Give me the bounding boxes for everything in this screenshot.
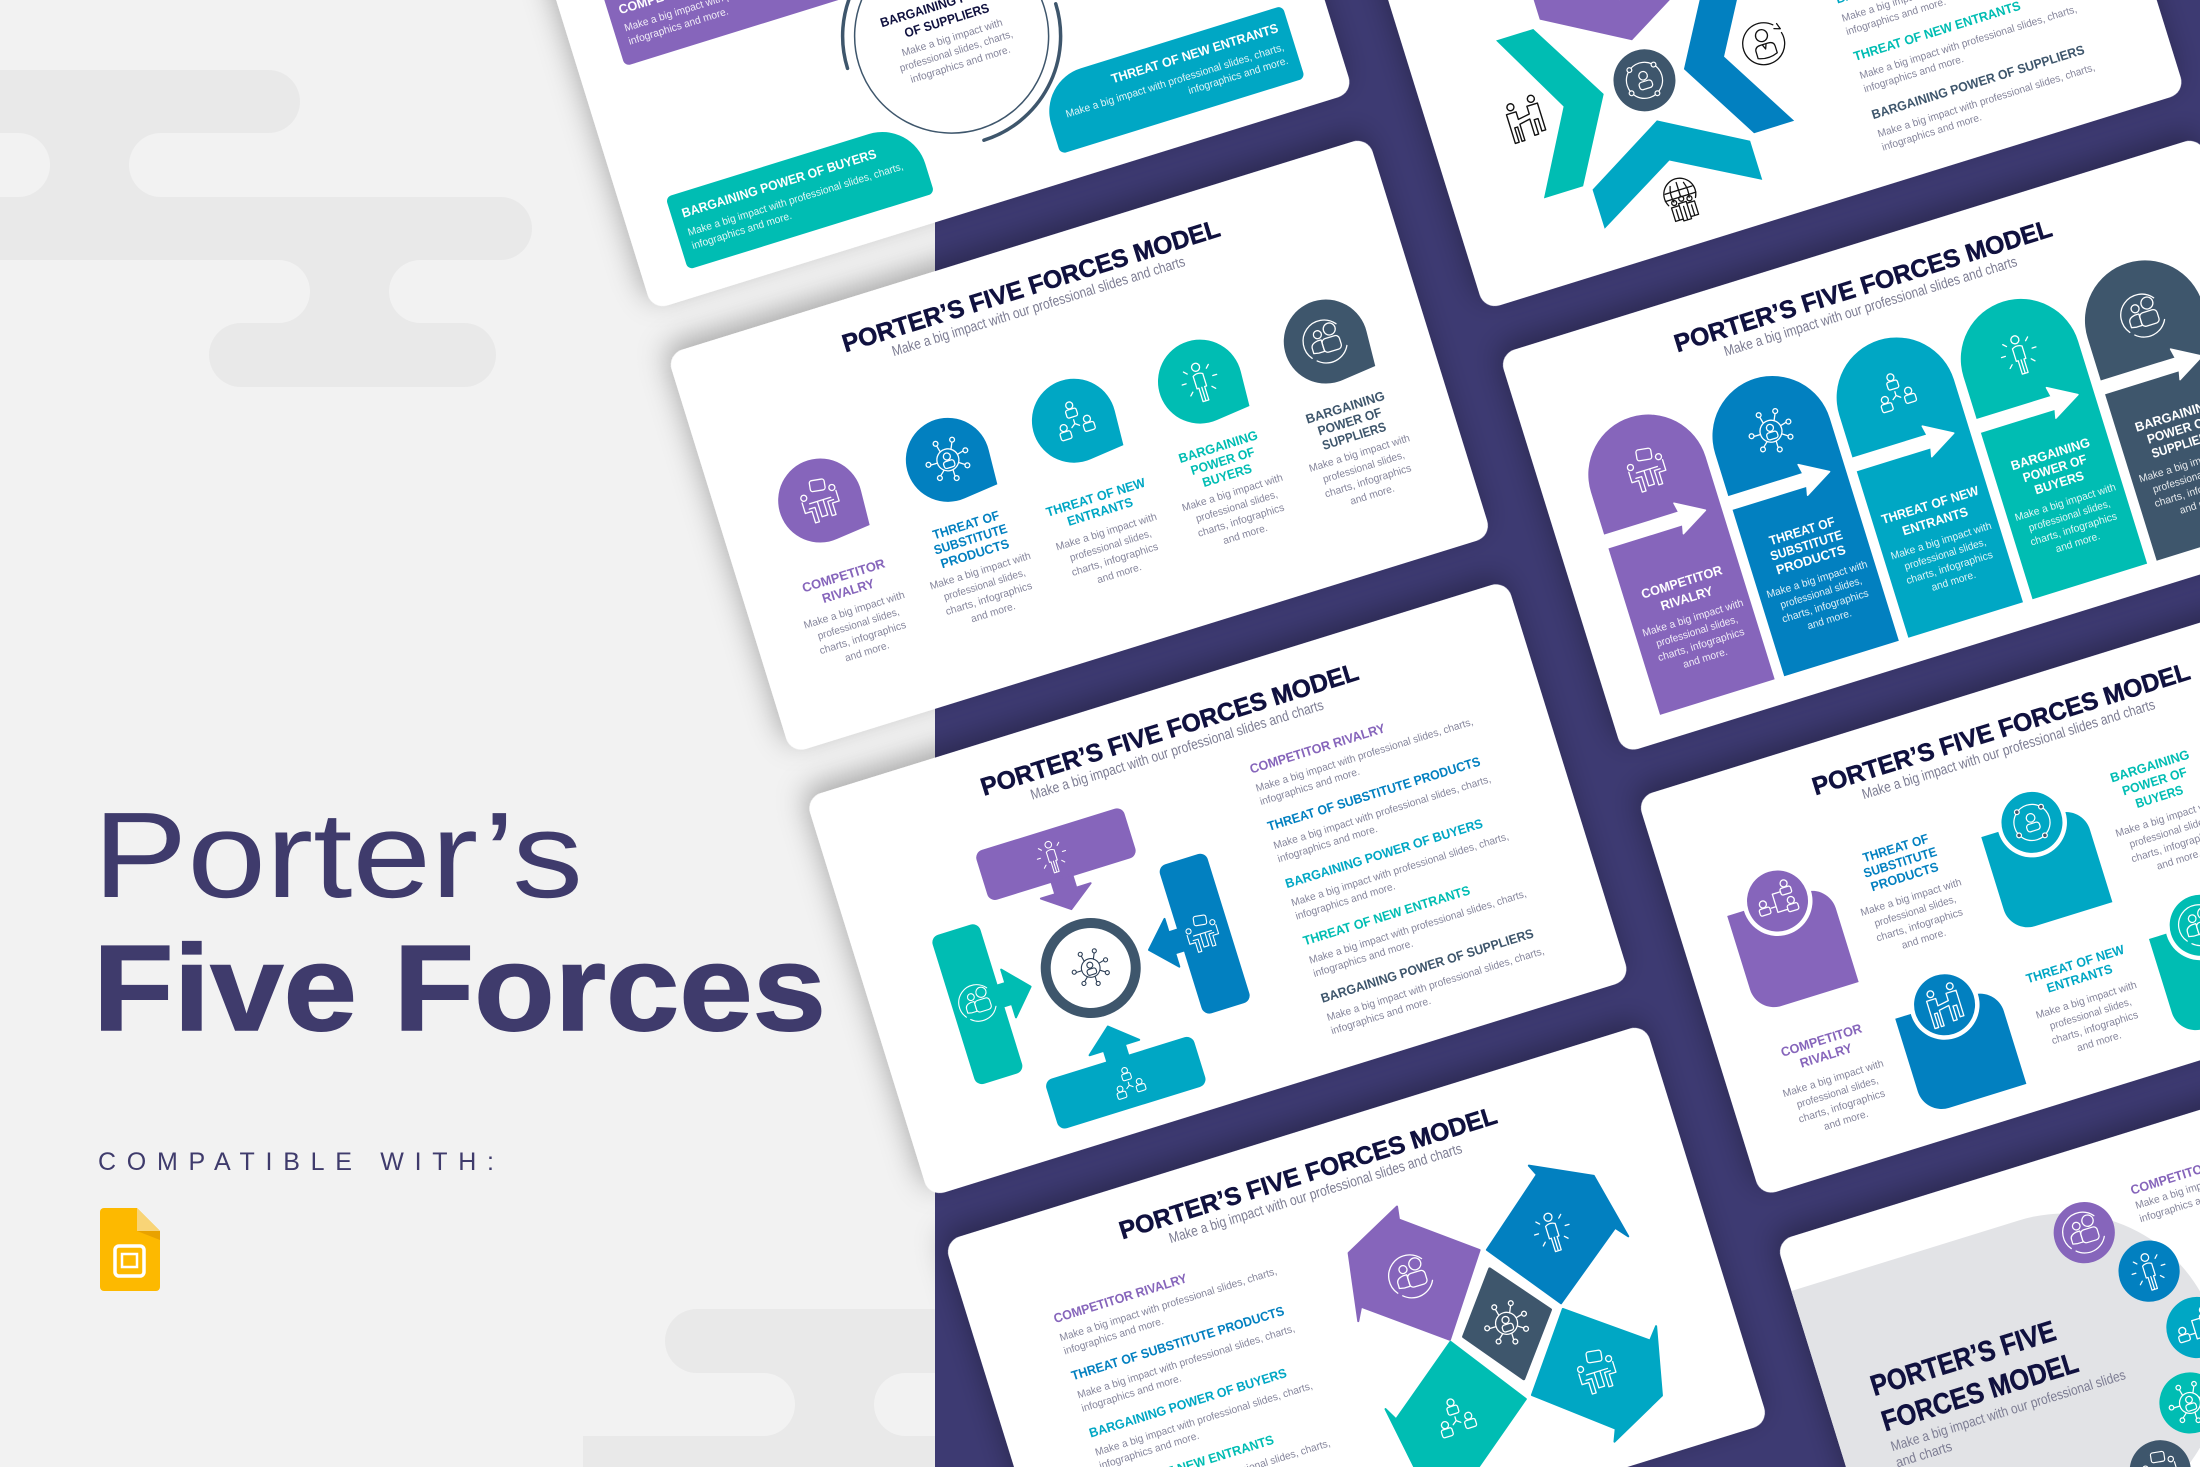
- slide title: [1867, 1312, 2082, 1438]
- force: threat of substitute products: charts, infographics: [944, 580, 1034, 618]
- callout: bargaining power of buyers: Make a big impact with professional slides, charts,: [686, 161, 905, 239]
- list: five forces: [1248, 695, 1550, 1037]
- force: bargaining power of buyers: professional slides,: [1194, 489, 1279, 525]
- list: five forces: Make a big impact with professional slides, charts,: [1272, 773, 1492, 852]
- list: five forces: Make a big impact with professional slides, charts,: [1325, 945, 1546, 1024]
- dark purple backdrop panel: [935, 0, 2200, 1467]
- force: bargaining power of buyers: [1136, 326, 1297, 556]
- slide card: [805, 580, 1630, 1197]
- force: threat of new entrants: and more.: [1096, 561, 1143, 586]
- list: five forces: Make a big impact with professional slides, charts,: [1058, 1265, 1279, 1344]
- slide subtitle: [1889, 1366, 2132, 1467]
- arch: threat of new entrants: professional slides,: [1903, 536, 1988, 573]
- callout: threat of new entrants: Make a big impact with professional slides, charts,: [1064, 41, 1286, 120]
- list: five forces: Make a big impact with professional slides, charts,: [1290, 831, 1510, 909]
- cloud decoration top left: [0, 70, 639, 387]
- slide card: [1499, 137, 2200, 754]
- slide title: PORTER’S FIVE: [1867, 1315, 2060, 1403]
- slide subtitle: Make a big impact with our professional slides and charts: [1167, 1141, 1464, 1247]
- text: competitor rivalry: and more.: [1822, 1108, 1870, 1133]
- text: threat of substitute products: charts, infographics: [1875, 906, 1964, 944]
- force: competitor rivalry: and more.: [843, 639, 891, 664]
- force: threat of substitute products: professional slides,: [942, 567, 1027, 603]
- force: bargaining power of suppliers: SUPPLIERS: [1320, 419, 1388, 453]
- slide title: PORTER’S FIVE FORCES MODEL: [1671, 215, 2056, 358]
- arrow: cyan lower right: [1510, 1284, 1685, 1461]
- center circle: bargaining power of suppliers: professional slides, charts,: [898, 28, 1014, 75]
- force: competitor rivalry: charts, infographics: [818, 619, 908, 657]
- arch: threat of new entrants: charts, infographics: [1905, 549, 1994, 587]
- left box arrow: [930, 913, 1054, 1086]
- list: five forces: infographics and more.: [1312, 938, 1415, 980]
- callout: threat of new entrants: THREAT OF NEW ENTRANTS: [1109, 20, 1280, 86]
- arch: threat of new entrants: and more.: [1930, 569, 1977, 594]
- arch: bargaining power of suppliers: [2069, 245, 2200, 561]
- star: blue chevron: [1659, 0, 1794, 147]
- force: threat of substitute products: and more.: [969, 600, 1017, 625]
- force: threat of new entrants: [1009, 366, 1171, 595]
- icon: google slides: [100, 1208, 160, 1291]
- force: competitor rivalry: professional slides,: [816, 606, 901, 643]
- slide: arc of circles on grey panel: [1776, 1024, 2200, 1467]
- arch: threat of substitute products: and more.: [1806, 607, 1853, 632]
- slide subtitle: Make a big impact with our professional slides and charts: [1722, 254, 2019, 360]
- arch: bargaining power of buyers: Make a big impact with: [2013, 481, 2117, 524]
- force: bargaining power of buyers: BUYERS: [1200, 461, 1254, 490]
- force: bargaining power of buyers: charts, infographics: [1196, 502, 1286, 540]
- list: five forces: COMPETITOR RIVALRY: [1052, 1270, 1189, 1326]
- list: five forces: Make a big impact with professional slides, charts,: [1858, 3, 2079, 82]
- text: threat of new entrants: Make a big impact with: [2034, 979, 2138, 1022]
- arch: bargaining power of buyers: charts, infographics: [2029, 510, 2118, 548]
- force: bargaining power of suppliers: Make a big impact with: [1308, 432, 1412, 475]
- force: bargaining power of buyers: and more.: [1222, 522, 1269, 547]
- badge: cyan: [2159, 1289, 2200, 1366]
- force: bargaining power of buyers: Make a big impact with: [1181, 472, 1285, 514]
- list: five forces: Make a big impact with professional slides, charts,: [1076, 1323, 1296, 1401]
- text: competitor rivalry: charts, infographics: [1797, 1087, 1887, 1126]
- text: threat of new entrants: charts, infographics: [2050, 1009, 2140, 1047]
- arch: threat of substitute products: professional slides,: [1779, 575, 1864, 611]
- list: five forces: Make a big impact with professional slides, charts,: [1254, 716, 1475, 795]
- arch: bargaining power of buyers: and more.: [2054, 530, 2102, 555]
- force: bargaining power of buyers: BARGAINING: [1177, 427, 1259, 466]
- text: threat of new entrants: professional slides,: [2048, 996, 2133, 1032]
- arrow: purple upper left: [1329, 1187, 1502, 1364]
- slide card: [667, 137, 1492, 754]
- badge: blue: [2111, 1233, 2187, 1309]
- force: threat of substitute products: [883, 405, 1045, 634]
- arch: threat of substitute products: SUBSTITUTE: [1768, 527, 1845, 564]
- list: five forces: infographics and more.: [1062, 1315, 1165, 1357]
- arch: threat of substitute products: PRODUCTS: [1774, 542, 1848, 577]
- slide title: PORTER’S FIVE FORCES MODEL: [1809, 658, 2194, 801]
- list: five forces: THREAT OF SUBSTITUTE PRODUCTS: [1266, 754, 1482, 834]
- text: threat of new entrants: and more.: [2075, 1029, 2123, 1054]
- slide: central ring with four arrows: [805, 580, 1630, 1197]
- force: threat of new entrants: charts, infographics: [1070, 541, 1160, 579]
- callout: competitor rivalry: [602, 0, 869, 66]
- icon: handshake: [1503, 94, 1547, 143]
- text: bargaining power of buyers: POWER OF: [2120, 764, 2189, 798]
- arch: competitor rivalry: Make a big impact with: [1641, 597, 1745, 640]
- list: five forces: infographics and more.: [1862, 53, 1965, 95]
- slide card: [1776, 1024, 2200, 1467]
- arch: competitor rivalry: professional slides,: [1655, 613, 1739, 650]
- slide card: [1637, 580, 2200, 1197]
- tile: threat of substitute products: [1885, 955, 2026, 1115]
- arrow: teal lower left: [1372, 1325, 1545, 1467]
- force: bargaining power of suppliers: professional slides,: [1321, 449, 1406, 486]
- star: purple chevron: [1528, 0, 1711, 65]
- arch: competitor rivalry: charts, infographics: [1656, 626, 1746, 664]
- force: threat of new entrants: Make a big impact with: [1054, 511, 1158, 553]
- tile: threat of new entrants: [1971, 773, 2112, 934]
- text: threat of substitute products: THREAT OF: [1861, 831, 1930, 865]
- tile: competitor rivalry: [1717, 852, 1859, 1013]
- text: threat of new entrants: ENTRANTS: [2045, 961, 2115, 996]
- arch: threat of substitute products: THREAT OF: [1767, 514, 1837, 548]
- text: competitor rivalry: [2129, 1116, 2200, 1225]
- callout: threat of new entrants: [1038, 6, 1305, 154]
- arch: threat of substitute products: Make a big impact with: [1765, 558, 1869, 601]
- badge: teal: [2152, 1365, 2200, 1441]
- icon: globe with people: [1660, 174, 1703, 224]
- text: competitor rivalry: COMPETITOR: [1779, 1020, 1864, 1060]
- arch: competitor rivalry: COMPETITOR: [1639, 562, 1725, 602]
- arch: threat of new entrants: THREAT OF NEW: [1880, 483, 1981, 527]
- list: five forces: THREAT OF SUBSTITUTE PRODUCTS: [1069, 1303, 1286, 1383]
- list: five forces: Make a big impact with professional slides, charts,: [1308, 888, 1528, 967]
- force: threat of substitute products: PRODUCTS: [939, 536, 1011, 571]
- list: five forces: COMPETITOR RIVALRY: [1248, 720, 1387, 777]
- list: five forces: BARGAINING POWER OF BUYERS: [1283, 816, 1485, 891]
- callout: bargaining power of buyers: BARGAINING POWER OF BUYERS: [680, 146, 878, 221]
- center diamond: [1447, 1255, 1568, 1392]
- icon: person in ring: [1737, 17, 1790, 70]
- force: bargaining power of suppliers: and more.: [1349, 483, 1396, 508]
- text: threat of new entrants: THREAT OF NEW: [2024, 942, 2127, 986]
- arch: competitor rivalry: and more.: [1682, 646, 1729, 671]
- arch: threat of new entrants: ENTRANTS: [1900, 504, 1970, 538]
- center circle: bargaining power of suppliers: infographics and more.: [909, 44, 1012, 86]
- text: competitor rivalry: Make a big impact with: [1781, 1058, 1885, 1100]
- text: competitor rivalry: professional slides,: [1795, 1074, 1880, 1111]
- force: competitor rivalry: Make a big impact with: [802, 589, 906, 632]
- star: center circle: [1606, 42, 1683, 119]
- text: threat of substitute products: PRODUCTS: [1869, 859, 1940, 894]
- grey panel: [1791, 1174, 2200, 1467]
- force: threat of new entrants: professional slides,: [1068, 528, 1153, 564]
- tile: bargaining power of buyers: [2139, 876, 2200, 1036]
- list: five forces: BARGAINING POWER OF SUPPLIERS: [1870, 42, 2086, 122]
- list: five forces: infographics and more.: [1880, 111, 1983, 154]
- list: five forces: infographics and more.: [1330, 995, 1432, 1037]
- center circle: bargaining power of suppliers: Make a big impact with: [900, 17, 1004, 59]
- arch: threat of substitute products: charts, infographics: [1781, 587, 1870, 626]
- text: bargaining power of buyers: [2097, 743, 2200, 881]
- slide: five chevron star (top of column 2): [1360, 0, 2185, 310]
- compatible with label: COMPATIBLE WITH:: [98, 1148, 494, 1176]
- force: threat of substitute products: Make a big impact with: [928, 550, 1032, 593]
- text: competitor rivalry: RIVALRY: [1798, 1040, 1854, 1071]
- list: five forces: [1798, 0, 2101, 154]
- list: five forces: infographics and more.: [1294, 880, 1397, 923]
- arch: threat of new entrants: [1821, 322, 2023, 638]
- slide: callout boxes around circle (top of column 1): [528, 0, 1353, 310]
- slide title: PORTER’S FIVE FORCES MODEL: [839, 215, 1224, 358]
- list: five forces: Make a big impact with professional slides, charts,: [1094, 1380, 1314, 1459]
- force: bargaining power of suppliers: charts, infographics: [1323, 462, 1413, 500]
- list: five forces: BARGAINING POWER OF SUPPLIERS: [1319, 926, 1536, 1006]
- arch: competitor rivalry: [1572, 399, 1775, 715]
- text: threat of substitute products: SUBSTITUTE: [1862, 844, 1939, 881]
- center ring: [1034, 912, 1147, 1024]
- list: five forces: infographics and more.: [1276, 823, 1379, 865]
- text: bargaining power of buyers: BUYERS: [2134, 782, 2185, 811]
- arrow: blue upper right: [1467, 1144, 1641, 1320]
- force: competitor rivalry: RIVALRY: [820, 576, 877, 606]
- slide title: PORTER’S FIVE FORCES MODEL: [1116, 1102, 1501, 1245]
- slide card: [528, 0, 1353, 310]
- force: threat of substitute products: SUBSTITUTE: [932, 521, 1009, 558]
- text: threat of substitute products: and more.: [1900, 927, 1948, 952]
- text: bargaining power of buyers: BARGAINING: [2108, 747, 2191, 785]
- list: five forces: THREAT OF NEW ENTRANTS: [1301, 882, 1472, 948]
- arch: threat of new entrants: Make a big impact with: [1889, 520, 1993, 562]
- force: bargaining power of suppliers: BARGAINING: [1304, 388, 1387, 427]
- list: five forces: infographics and more.: [1258, 766, 1361, 808]
- text: threat of substitute products: professional slides,: [1873, 893, 1958, 930]
- slide: diamond arrows: [944, 1024, 1769, 1467]
- slide subtitle: Make a big impact with our professional slides and charts: [890, 254, 1187, 360]
- center circle: bargaining power of suppliers: [815, 0, 1088, 172]
- slide: five drops: [667, 137, 1492, 754]
- slide subtitle: Make a big impact with our professional slides and charts: [1029, 698, 1326, 804]
- text: threat of new entrants: [2023, 941, 2151, 1063]
- list: five forces: BARGAINING POWER OF BUYERS: [1087, 1365, 1289, 1441]
- slide card: [944, 1024, 1769, 1467]
- arch: competitor rivalry: RIVALRY: [1659, 583, 1715, 613]
- top box arrow: [974, 806, 1147, 932]
- force: competitor rivalry: COMPETITOR: [800, 555, 887, 595]
- force: threat of new entrants: ENTRANTS: [1065, 494, 1135, 529]
- list: five forces: [1052, 1244, 1336, 1467]
- slide title: PORTER’S FIVE FORCES MODEL: [977, 658, 1362, 802]
- arch: threat of substitute products: [1696, 361, 1899, 677]
- list: five forces: infographics and more.: [1080, 1372, 1183, 1415]
- force: bargaining power of suppliers: [1262, 286, 1424, 516]
- force: threat of substitute products: THREAT OF: [931, 508, 1001, 542]
- slide subtitle: Make a big impact with our professional slides: [1889, 1366, 2127, 1454]
- star: teal chevron: [1495, 15, 1628, 198]
- force: bargaining power of buyers: POWER OF: [1189, 444, 1256, 478]
- arch: bargaining power of buyers: [1945, 284, 2147, 600]
- slide card: [1360, 0, 2185, 310]
- slide: arches with arrows: [1499, 137, 2200, 754]
- cloud decoration bottom: [560, 1309, 1074, 1467]
- bottom box arrow: [1034, 1003, 1208, 1131]
- list: five forces: Make a big impact with professional slides, charts,: [1876, 62, 2097, 140]
- badge: purple: [2046, 1194, 2123, 1271]
- callout: threat of new entrants: infographics and more.: [1187, 55, 1290, 97]
- text: threat of substitute products: Make a big impact with: [1859, 876, 1963, 919]
- arch: bargaining power of buyers: POWER OF: [2021, 451, 2089, 485]
- star: cyan chevron: [1579, 96, 1762, 229]
- callout: bargaining power of buyers: [665, 121, 934, 270]
- text: competitor rivalry: [1769, 1017, 1898, 1142]
- heading: Porter's: Porter’s: [93, 787, 583, 923]
- badge: slate: [2122, 1432, 2199, 1467]
- arch: bargaining power of buyers: BUYERS: [2033, 468, 2086, 497]
- force: competitor rivalry: [758, 445, 919, 673]
- text: threat of substitute products: [1843, 825, 1976, 960]
- right box arrow: [1126, 852, 1252, 1025]
- slide title: FORCES MODEL: [1878, 1347, 2082, 1438]
- callout: bargaining power of buyers: infographics and more.: [691, 210, 793, 252]
- force: threat of new entrants: THREAT OF NEW: [1044, 475, 1148, 520]
- arch: bargaining power of buyers: professional slides,: [2027, 498, 2112, 534]
- heading: Five Forces: Five Forces: [93, 920, 826, 1056]
- arch: bargaining power of buyers: BARGAINING: [2009, 435, 2092, 473]
- slide: tiles with circle badges: [1637, 580, 2200, 1197]
- callout: competitor rivalry: infographics and more.: [627, 5, 730, 48]
- force: bargaining power of suppliers: POWER OF: [1316, 405, 1383, 439]
